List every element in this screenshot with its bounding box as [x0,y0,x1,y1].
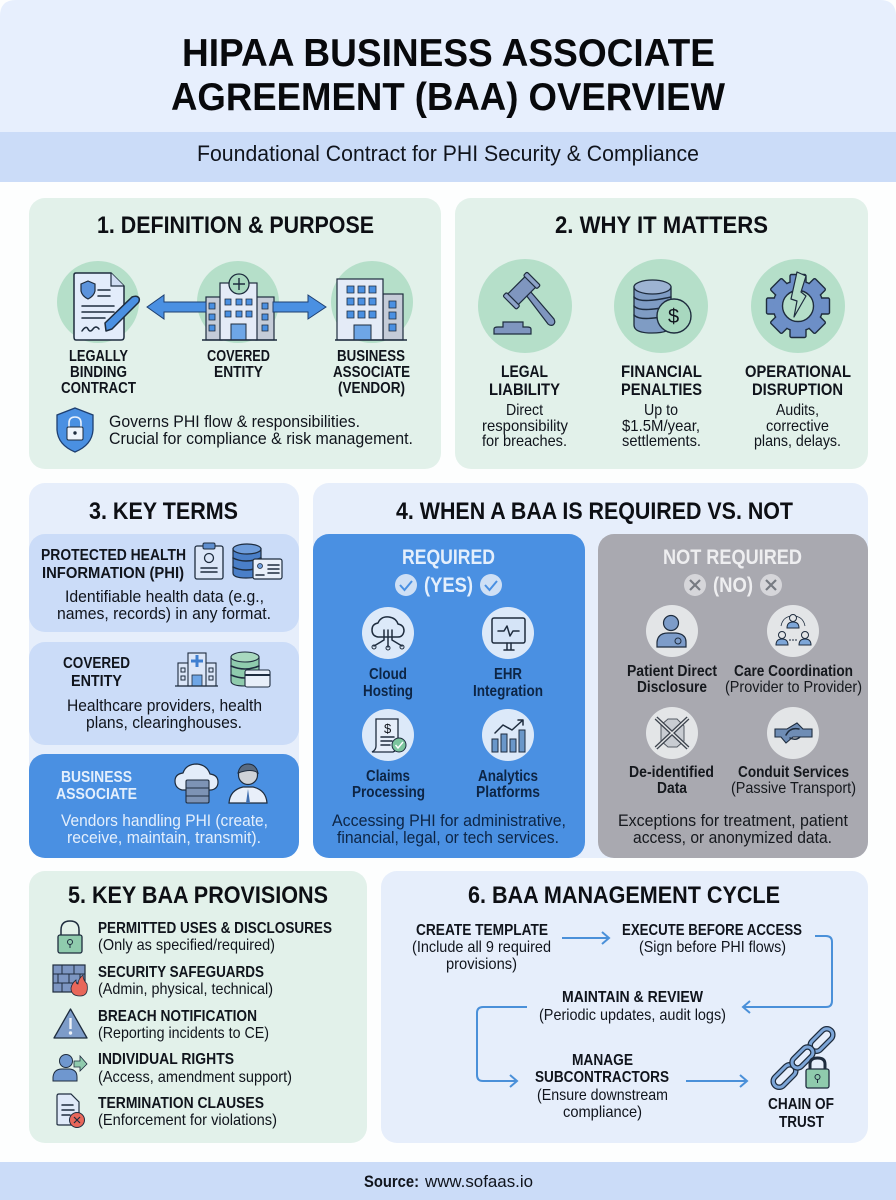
label: business associate [333,348,410,397]
text: financial penalties: settlements. [622,433,701,450]
icon: padlock [58,921,82,953]
arrow: subcontractors to chain of trust [686,1075,747,1087]
subtitle: Foundational Contract for PHI Security & Compliance [197,141,699,166]
provision: termination clauses: (Enforcement for violations) [98,1112,277,1129]
step: execute before access: EXECUTE BEFORE ACCESS [622,922,802,939]
icon: vendor person [229,764,267,803]
item: care coordination: Care Coordination [734,663,853,680]
card: not required [598,534,868,858]
footer source: Source: [364,1172,419,1191]
provision: security safeguards: SECURITY SAFEGUARDS [98,964,264,981]
required heading: REQUIRED [402,546,495,569]
card text: plans, clearinghouses. [86,714,242,732]
text: legal liability: LEGAL [501,362,548,381]
icon: business associate building [331,261,413,343]
label: chain of trust [768,1096,834,1131]
title: AGREEMENT (BAA) OVERVIEW [171,76,725,119]
step: maintain and review: MAINTAIN & REVIEW [562,989,704,1006]
item: care coordination: (Provider to Provider) [725,679,862,696]
panel: when a BAA is required [313,483,868,858]
footer source: www.sofaas.io [424,1172,533,1191]
text: purpose summary: Governs PHI flow & responsibilities. [109,413,360,431]
card title [41,547,186,582]
text: financial penalties: PENALTIES [621,380,702,399]
icon: broken gear [751,259,845,353]
item: de-identified data [629,707,714,797]
footer source [0,1162,896,1200]
item: claims processing: Claims [366,768,410,785]
item: patient direct disclosure: Disclosure [637,679,707,696]
arrow: covered entity to business associate [273,295,326,319]
item: EHR integration: EHR [494,666,522,683]
arrow: execute to maintain [743,936,832,1013]
provision: termination clauses [98,1095,277,1129]
label: chain of trust: TRUST [779,1114,824,1131]
step: manage subcontractors: MANAGE [572,1052,633,1069]
card title: ASSOCIATE [56,786,137,803]
text: financial penalties [621,362,702,450]
panel: definition and purpose [29,198,441,469]
step: create template: provisions) [446,956,517,973]
text: operational disruption: OPERATIONAL [745,362,851,381]
provision: security safeguards: (Admin, physical, technical) [98,981,273,998]
item: conduit services [731,707,856,797]
card text: Healthcare providers, health [67,697,262,715]
icon: warning triangle [54,1009,87,1038]
icon: person with arrow [53,1054,87,1081]
card: business associate [29,754,299,858]
card text: Vendors handling PHI (create, [61,812,268,830]
step: execute before access [622,922,802,956]
card text [61,812,268,847]
required summary: Accessing PHI for administrative, [332,812,566,830]
required heading [395,546,502,597]
item: de-identified data: De-identified [629,764,714,781]
not required heading [663,546,802,597]
provision: breach notification: (Reporting incidents to CE) [98,1025,269,1042]
item: EHR integration [473,607,543,700]
provision: breach notification [98,1008,269,1042]
not required heading: (NO) [713,574,753,597]
item: analytics platforms: Platforms [476,784,540,801]
heading: 5. KEY BAA PROVISIONS [68,882,328,909]
label: business associate: BUSINESS [337,348,405,365]
icon: database and id card [233,544,282,579]
item: de-identified data: Data [657,780,687,797]
label: chain of trust: CHAIN OF [768,1096,834,1113]
text: financial penalties: $1.5M/year, [622,418,700,435]
text: purpose summary [109,413,413,448]
icon: coin stack with dollar: $ [668,306,679,328]
item: patient direct disclosure [627,605,718,696]
text: operational disruption: plans, delays. [754,433,841,450]
text: financial penalties: FINANCIAL [621,362,702,381]
text: legal liability [482,362,568,450]
item: EHR integration: Integration [473,683,543,700]
heading: 2. WHY IT MATTERS [555,212,768,239]
card text: Identifiable health data (e.g., [65,588,264,606]
label: covered entity [207,348,270,381]
item: patient direct disclosure: Patient Direct [627,663,718,680]
step: maintain and review: (Periodic updates, audit logs) [539,1007,726,1024]
item: analytics platforms: Analytics [478,768,538,785]
card title: COVERED [63,655,130,672]
icon: database and payment card [231,652,270,687]
item: claims processing: Processing [352,784,425,801]
item: conduit services: (Passive Transport) [731,780,856,797]
card text: names, records) in any format. [57,605,271,623]
card title: INFORMATION (PHI) [42,565,184,582]
step: manage subcontractors: SUBCONTRACTORS [535,1069,669,1086]
required summary [332,812,566,847]
step: manage subcontractors: (Ensure downstream [537,1087,668,1104]
not required summary [618,812,848,847]
item: care coordination [725,605,862,696]
provision: individual rights [98,1051,292,1086]
icon: document with cross [57,1094,84,1128]
text: operational disruption [745,362,851,450]
required summary: financial, legal, or tech services. [337,829,559,847]
step: maintain and review [539,989,726,1024]
step: manage subcontractors: compliance) [563,1104,642,1121]
icon: gavel [478,259,572,353]
item: claims processing [352,709,425,801]
card: covered entity [29,642,299,745]
label: legally binding contract: LEGALLY [69,348,128,365]
label: covered entity: COVERED [207,348,270,365]
label: legally binding contract: CONTRACT [61,380,136,397]
step: create template: (Include all 9 required [412,939,551,956]
item: conduit services: Conduit Services [738,764,849,781]
card text: receive, maintain, transmit). [67,829,261,847]
provision: breach notification: BREACH NOTIFICATION [98,1008,257,1025]
card text [57,588,271,623]
required heading: (YES) [424,574,473,597]
item: cloud hosting: Hosting [363,683,413,700]
panel: why it matters [455,198,868,469]
not required heading: NOT REQUIRED [663,546,802,569]
text: operational disruption: corrective [766,418,829,435]
item: analytics platforms [476,709,540,801]
item: cloud hosting [362,607,414,700]
label: covered entity: ENTITY [214,364,263,381]
title [171,32,725,119]
text: legal liability: for breaches. [482,433,567,450]
icon: chain with padlock [771,1026,835,1090]
provision: permitted uses [98,920,332,954]
text: legal liability: LIABILITY [489,380,561,399]
heading: 4. WHEN A BAA IS REQUIRED VS. NOT [396,498,793,525]
step: execute before access: (Sign before PHI flows) [639,939,786,956]
provision: termination clauses: TERMINATION CLAUSES [98,1095,264,1112]
step: create template [412,922,551,973]
label: business associate: ASSOCIATE [333,364,410,381]
label: legally binding contract: BINDING [70,364,127,381]
icon: contract document with pen [57,261,139,343]
label: business associate: (VENDOR) [338,380,405,397]
not required summary: access, or anonymized data. [633,829,832,847]
icon: hospital [175,653,218,686]
not required summary: Exceptions for treatment, patient [618,812,848,830]
header banner [0,0,896,182]
item: cloud hosting: Cloud [369,666,407,683]
text: operational disruption: DISRUPTION [752,380,843,399]
provision: permitted uses: PERMITTED USES & DISCLOSURES [98,920,332,937]
provision: permitted uses: (Only as specified/required) [98,937,275,954]
arrow: maintain to subcontractors [477,1007,527,1087]
step: create template: CREATE TEMPLATE [416,922,548,939]
panel: BAA management cycle [381,871,868,1143]
card title: ENTITY [71,673,122,690]
arrow: contract to covered entity [147,295,206,319]
text: purpose summary: Crucial for compliance & risk management. [109,430,413,448]
card title: PROTECTED HEALTH [41,547,186,564]
icon: clipboard [195,543,223,579]
icon: firewall [53,965,87,996]
card: protected health information [29,534,299,632]
arrow: create to execute [562,932,609,944]
panel: key terms [29,483,299,858]
label: legally binding contract [61,348,136,397]
provision: individual rights: (Access, amendment support) [98,1069,292,1086]
icon: cloud server [175,764,218,803]
heading: 1. DEFINITION & PURPOSE [97,212,374,239]
icon: shield with lock [57,408,93,452]
text: legal liability: responsibility [482,418,568,435]
text: operational disruption: Audits, [776,402,819,419]
card title: BUSINESS [61,769,132,786]
icon: covered entity hospital [197,261,279,343]
step: manage subcontractors [535,1052,669,1121]
card: required [313,534,585,858]
provision: security safeguards [98,964,273,998]
card title [56,769,137,803]
heading: 3. KEY TERMS [89,498,238,525]
title: HIPAA BUSINESS ASSOCIATE [182,32,715,75]
heading: 6. BAA MANAGEMENT CYCLE [468,882,780,909]
card title [63,655,130,690]
card text [67,697,262,732]
text: financial penalties: Up to [644,402,678,419]
item: claims processing: $ [384,721,392,736]
panel: key BAA provisions [29,871,367,1143]
icon: coin stack with dollar [614,259,708,353]
text: legal liability: Direct [506,402,543,419]
provision: individual rights: INDIVIDUAL RIGHTS [98,1051,234,1068]
